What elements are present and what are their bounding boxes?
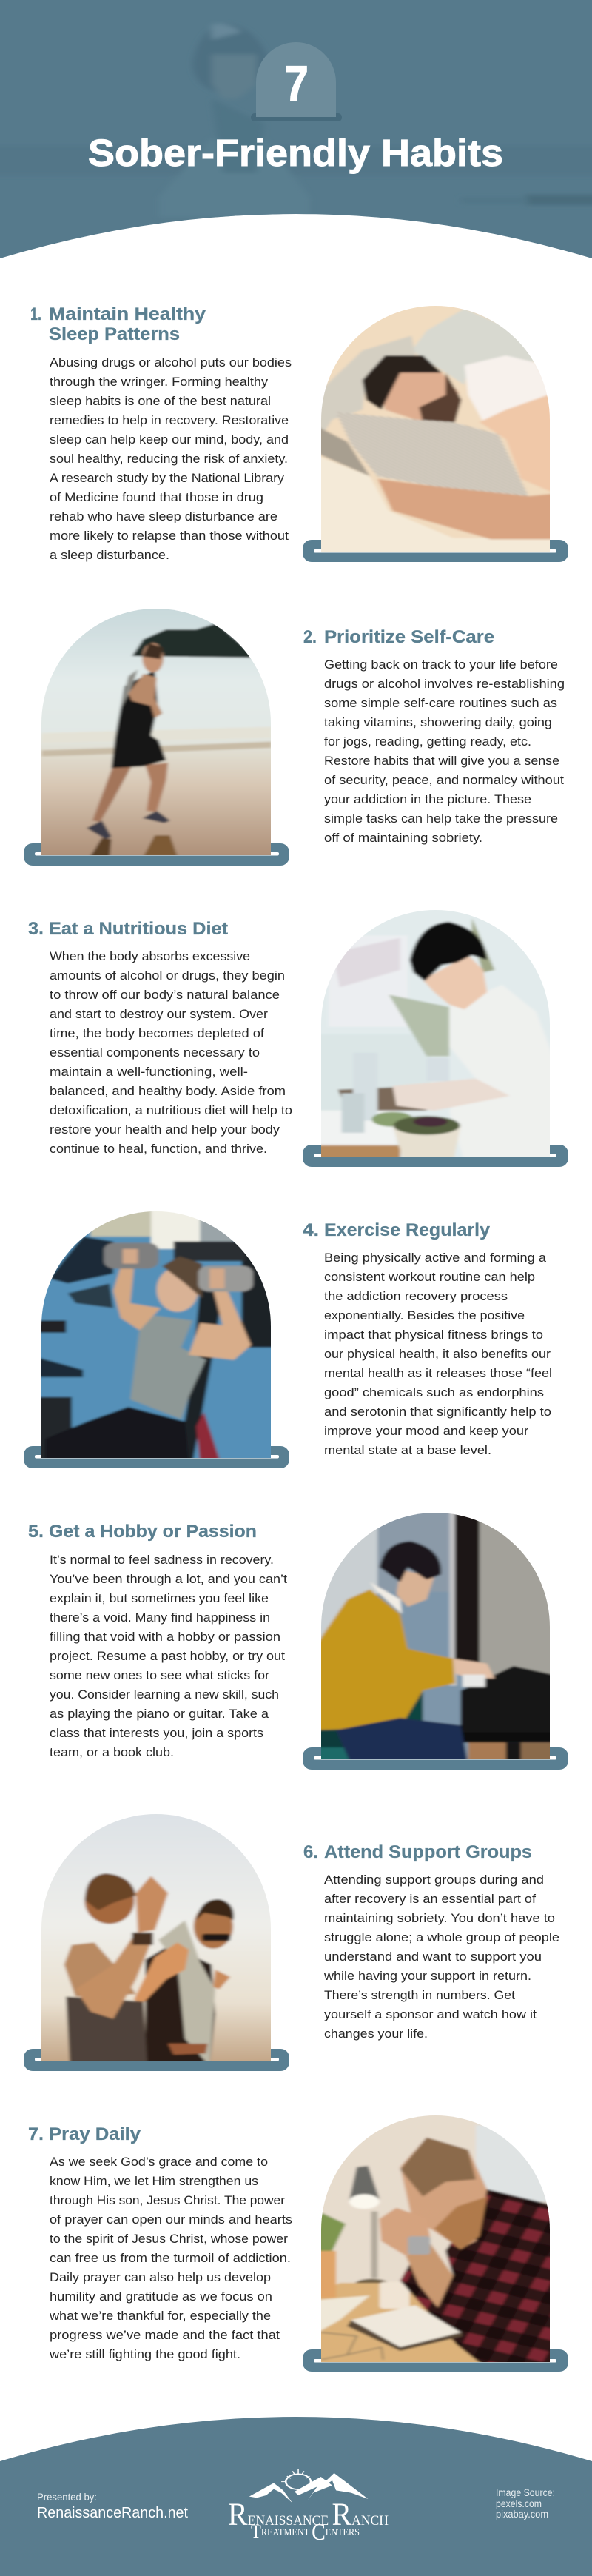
body text: good” chemicals such as endorphins: [324, 1385, 544, 1399]
body text: [324, 658, 565, 845]
heading: Get a Hobby or Passion: [49, 1522, 257, 1542]
body text: [50, 949, 292, 1156]
panel: habit 7 pray: [28, 2108, 568, 2372]
body text: of Medicine found that those in drug: [50, 490, 263, 504]
body text: humility and gratitude as we focus on: [50, 2289, 272, 2304]
panel: habit 4 exercise: [24, 1205, 552, 1468]
body text: more likely to relapse than those without: [50, 529, 289, 543]
heading: 5.: [28, 1522, 44, 1542]
body text: rehab who have sleep disturbance are: [50, 509, 278, 523]
heading: Exercise Regularly: [324, 1220, 491, 1240]
body text: a sleep disturbance.: [50, 548, 169, 562]
body text: team, or a book club.: [50, 1745, 174, 1759]
wordmark second line: C: [312, 2518, 326, 2545]
body text: there’s a void. Many find happiness in: [50, 1610, 270, 1625]
body text: You’ve been through a lot, and you can’t: [50, 1572, 287, 1586]
heading: Sleep Patterns: [49, 324, 180, 344]
heading: 7.: [28, 2124, 44, 2144]
body text: our physical health, it also benefits our: [324, 1347, 551, 1361]
image source: Image Source:: [496, 2487, 555, 2498]
body text: impact that physical fitness brings to: [324, 1328, 543, 1342]
body text: know Him, we let Him strengthen us: [50, 2174, 258, 2188]
body text: Attending support groups during and: [324, 1873, 544, 1887]
body text: while having your support in return.: [323, 1969, 531, 1983]
photo: man playing piano: [321, 1513, 550, 1759]
image source: pexels.com: [496, 2498, 542, 2509]
body text: mental state at a base level.: [324, 1443, 491, 1457]
shelf: [303, 1145, 568, 1167]
body text: continue to heal, function, and thrive.: [50, 1142, 267, 1156]
body text: There’s strength in numbers. Get: [324, 1988, 515, 2002]
body text: project. Resume a past hobby, or try out: [50, 1649, 285, 1663]
shelf: [303, 2349, 568, 2372]
shelf: [24, 843, 289, 866]
body text: mental health as it releases those “feel: [324, 1366, 552, 1380]
photo: man praying at desk: [321, 2115, 550, 2362]
heading: Eat a Nutritious Diet: [49, 919, 228, 939]
body text: improve your mood and keep your: [324, 1424, 528, 1438]
body text: through His son, Jesus Christ. The power: [50, 2193, 285, 2207]
body text: exponentially. Besides the positive: [324, 1308, 525, 1322]
body text: soul healthy, reducing the risk of anxiety.: [50, 452, 288, 466]
heading: [30, 304, 206, 344]
icon: header arch with shelf: [251, 42, 342, 121]
body text: When the body absorbs excessive: [50, 949, 250, 963]
body text: It’s normal to feel sadness in recovery.: [50, 1553, 274, 1567]
body text: and start to destroy our system. Over: [50, 1007, 268, 1021]
body text: Being physically active and forming a: [324, 1251, 547, 1265]
panel: habit 3 diet: [28, 903, 568, 1167]
heading: 3.: [28, 919, 44, 939]
logo: Renaissance Ranch mountains and wordmark: [228, 2469, 388, 2545]
body text: Daily prayer can also help us develop: [50, 2270, 271, 2284]
footer: [0, 2417, 592, 2576]
body text: progress we’ve made and the fact that: [50, 2328, 280, 2342]
heading: Prioritize Self-Care: [324, 627, 494, 647]
heading: Pray Daily: [49, 2124, 141, 2144]
body text: [50, 355, 292, 562]
body text: simple tasks can help take the pressure: [324, 812, 558, 826]
body text: after recovery is an essential part of: [324, 1892, 536, 1906]
panel: habit 5 hobby: [28, 1505, 568, 1770]
shelf: [24, 2049, 289, 2071]
body text: drugs or alcohol involves re-establishing: [324, 677, 565, 691]
blurred background photo: man in hat: [195, 24, 592, 219]
body text: [324, 1251, 552, 1457]
body text: off of maintaining sobriety.: [324, 831, 482, 845]
presented by: RenaissanceRanch.net: [37, 2505, 188, 2521]
number seven: 7: [284, 56, 309, 112]
body text: explain it, but sometimes you feel like: [50, 1591, 269, 1605]
body text: taking vitamins, showering daily, going: [324, 715, 552, 729]
heading: 6.: [303, 1842, 318, 1862]
presented by: Presented by:: [37, 2491, 97, 2503]
panel: habit 6 support groups: [24, 1807, 559, 2071]
heading: Maintain Healthy: [49, 304, 206, 324]
body text: and serotonin that significantly help to: [324, 1405, 551, 1419]
body text: [323, 1873, 559, 2041]
body text: sleep can help keep our mind, body, and: [50, 432, 289, 446]
body text: of security, peace, and normalcy without: [324, 773, 564, 787]
photo: man jogging on beach: [41, 609, 271, 855]
header banner: [0, 0, 592, 267]
body text: Getting back on track to your life before: [324, 658, 558, 672]
presented by: [37, 2491, 188, 2521]
body text: your addiction in the picture. These: [324, 792, 531, 806]
photo: man sleeping on pillow: [321, 306, 550, 552]
body text: essential components necessary to: [50, 1046, 260, 1060]
body text: A research study by the National Library: [50, 471, 285, 485]
body text: maintain a well-functioning, well-: [50, 1065, 248, 1079]
body text: to throw off our body’s natural balance: [50, 988, 280, 1002]
wordmark second line: REATMENT: [261, 2527, 312, 2538]
body text: filling that void with a hobby or passion: [50, 1630, 280, 1644]
body text: you. Consider learning a new skill, such: [50, 1687, 279, 1702]
body text: balanced, and healthy body. Aside from: [50, 1084, 286, 1098]
icon: sun and mountains: [249, 2469, 368, 2503]
body text: yourself a sponsor and watch how it: [324, 2007, 536, 2021]
heading: 4.: [303, 1220, 319, 1240]
body text: the addiction recovery process: [324, 1289, 508, 1303]
body text: understand and want to support you: [324, 1950, 542, 1964]
body text: struggle alone; a whole group of people: [324, 1930, 559, 1944]
photo: two friends dancing at sunset: [41, 1814, 271, 2061]
body text: changes your life.: [324, 2027, 428, 2041]
body text: [49, 2155, 292, 2361]
body text: detoxification, a nutritious diet will help to: [50, 1103, 292, 1117]
panel: habit 1 sleep: [30, 298, 568, 562]
panel: habit 2 self-care: [24, 602, 565, 866]
body text: as playing the piano or guitar. Take a: [50, 1707, 269, 1721]
photo: man preparing salad: [321, 910, 550, 1157]
photo: man lifting dumbbells: [41, 1211, 271, 1458]
body text: for jogs, reading, getting ready, etc.: [324, 735, 531, 749]
wordmark second line: ENTERS: [326, 2527, 360, 2538]
shelf: [303, 540, 568, 562]
body text: restore your health and help your body: [50, 1123, 280, 1137]
body text: maintaining sobriety. You don’t have to: [324, 1911, 555, 1925]
body text: amounts of alcohol or drugs, they begin: [50, 968, 285, 983]
body text: consistent workout routine can help: [324, 1270, 535, 1284]
body text: [50, 1553, 287, 1759]
wordmark: RENAISSANCE RANCH: [228, 2498, 388, 2532]
heading: 1.: [30, 304, 41, 324]
body text: time, the body becomes depleted of: [50, 1026, 264, 1040]
wordmark second line: T: [251, 2521, 261, 2543]
body text: through the wringer. Forming healthy: [50, 375, 269, 389]
body text: Abusing drugs or alcohol puts our bodies: [50, 355, 292, 369]
body text: can free us from the turmoil of addiction.: [50, 2251, 291, 2265]
body text: we’re still fighting the good fight.: [49, 2347, 240, 2361]
heading: 2.: [303, 627, 317, 647]
body text: Restore habits that will give you a sense: [324, 754, 559, 768]
image source: [496, 2487, 555, 2520]
body text: what we’re thankful for, especially the: [49, 2309, 271, 2323]
body text: sleep habits is one of the best natural: [50, 394, 271, 408]
body text: some simple self-care routines such as: [324, 696, 557, 710]
title: Sober-Friendly Habits: [88, 132, 503, 174]
shelf: [24, 1446, 289, 1468]
heading: Attend Support Groups: [324, 1842, 532, 1862]
image source: pixabay.com: [496, 2509, 548, 2520]
shelf: [303, 1747, 568, 1770]
body text: As we seek God’s grace and come to: [50, 2155, 268, 2169]
body text: class that interests you, join a sports: [50, 1726, 263, 1740]
body text: to the spirit of Jesus Christ, whose power: [50, 2232, 288, 2246]
body text: some new ones to see what sticks for: [50, 1668, 269, 1682]
body text: remedies to help in recovery. Restorative: [50, 413, 289, 427]
body text: of prayer can open our minds and hearts: [50, 2212, 292, 2227]
